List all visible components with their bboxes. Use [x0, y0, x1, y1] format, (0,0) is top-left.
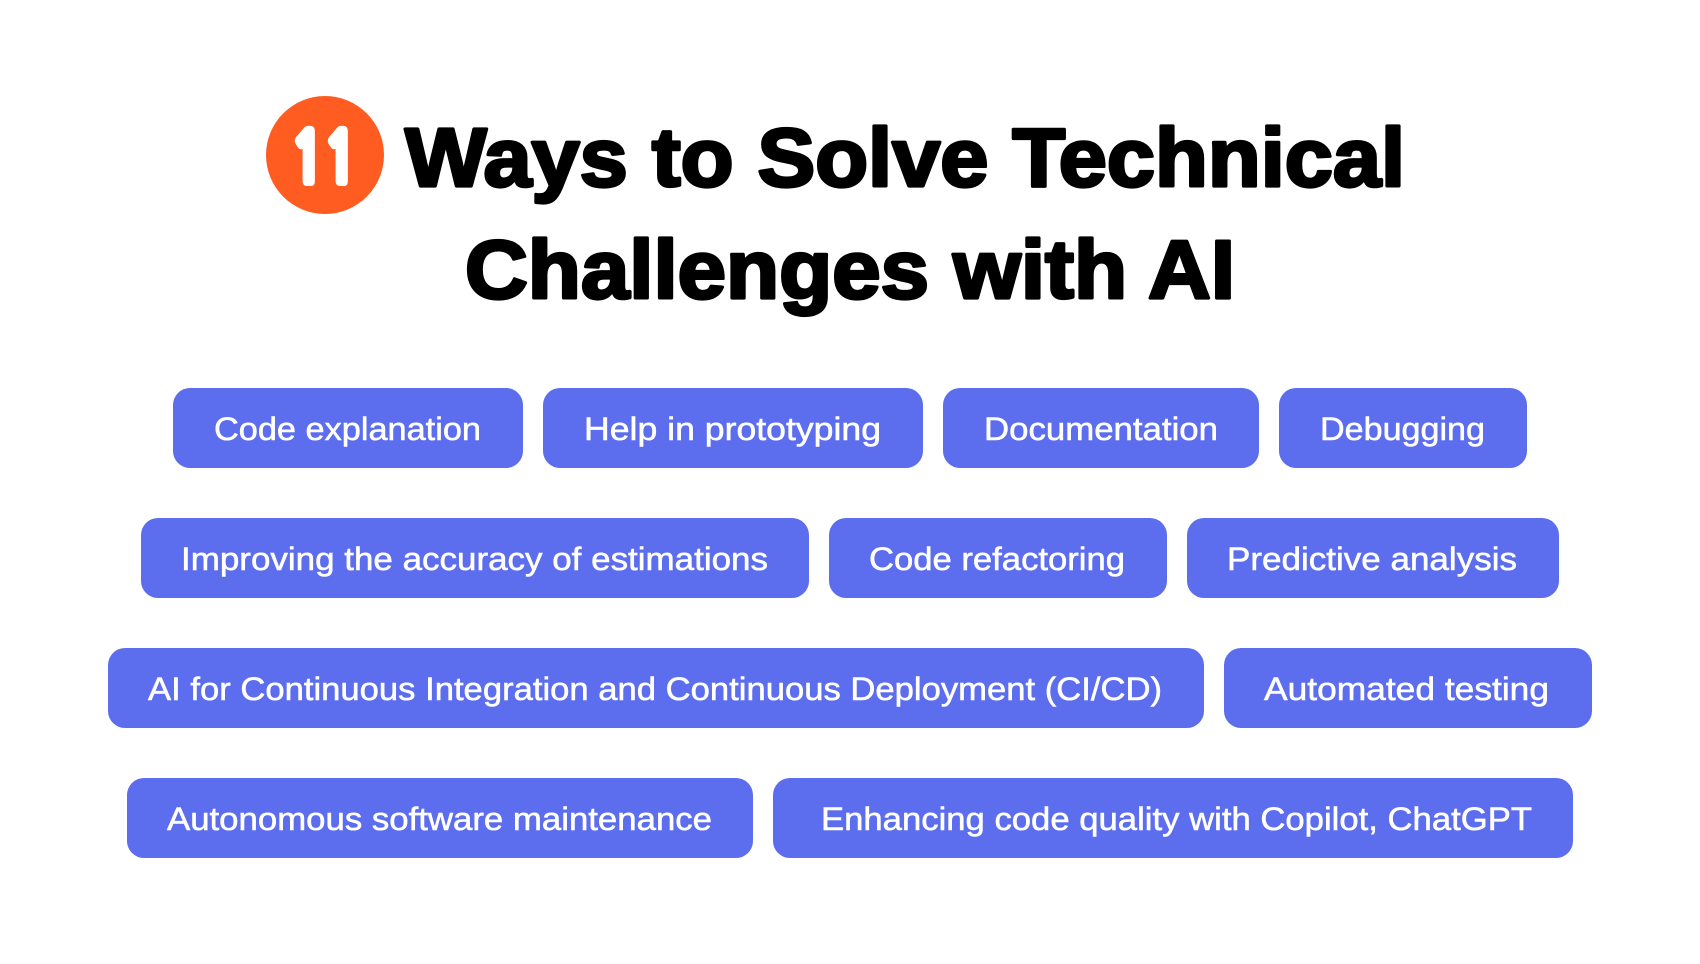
tag: Documentation: Documentation	[984, 411, 1218, 447]
tag: Help in prototyping: Help in prototyping	[584, 411, 881, 447]
tag: AI for CI/CD	[108, 648, 1204, 728]
tag: Code explanation: Code explanation	[214, 411, 481, 447]
title block	[266, 96, 1405, 316]
tag: Documentation	[943, 388, 1259, 468]
badge: number 11: 11	[291, 126, 357, 193]
tag: AI for CI/CD: AI for Continuous Integration and Continuous Deployment (CI/CD)	[148, 671, 1162, 707]
tag: Autonomous software maintenance	[127, 778, 753, 858]
tag: Improving the accuracy of estimations: Improving the accuracy of estimations	[181, 541, 768, 577]
tag: Code refactoring: Code refactoring	[869, 541, 1125, 577]
tag: Debugging: Debugging	[1320, 411, 1485, 447]
title line 1: Ways to Solve Technical	[405, 111, 1405, 204]
tag: Automated testing	[1224, 648, 1592, 728]
tag: Code explanation	[173, 388, 523, 468]
tag: Improving the accuracy of estimations	[141, 518, 809, 598]
tag: Help in prototyping	[543, 388, 923, 468]
tag: Code refactoring	[829, 518, 1167, 598]
tag: Automated testing: Automated testing	[1264, 671, 1549, 707]
tag: Autonomous software maintenance: Autonomous software maintenance	[167, 801, 712, 837]
title line 2: Challenges with AI	[465, 223, 1235, 316]
tag: Predictive analysis: Predictive analysis	[1227, 541, 1517, 577]
tag: Enhancing code quality	[773, 778, 1573, 858]
tag: Debugging	[1279, 388, 1527, 468]
badge: number 11	[266, 96, 384, 214]
tag: Predictive analysis	[1187, 518, 1559, 598]
tag: Enhancing code quality: Enhancing code quality with Copilot, ChatGPT	[821, 801, 1532, 837]
